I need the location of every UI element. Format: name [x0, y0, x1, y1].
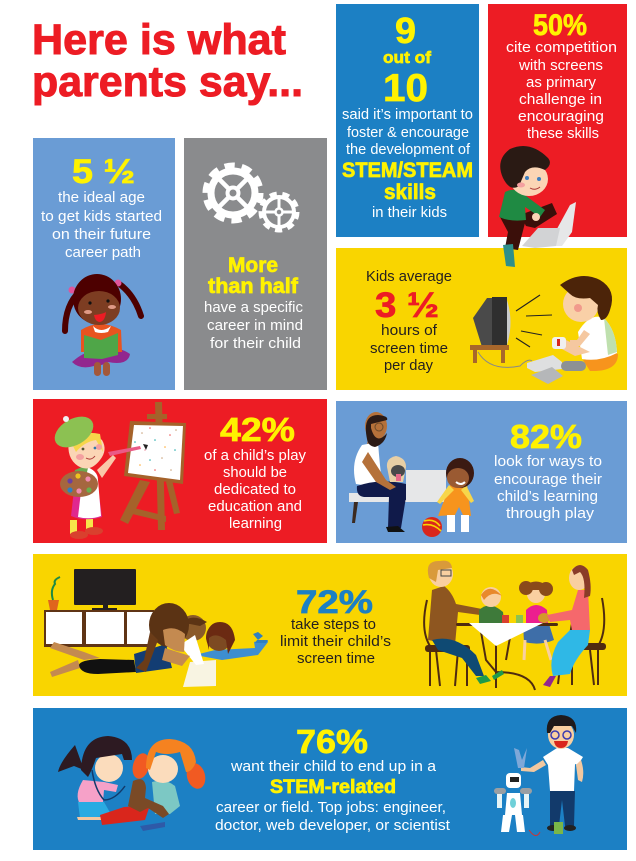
text: play description: learning [229, 516, 282, 532]
text: play description: education and [208, 499, 302, 515]
panel: 82 percent learning through play [336, 401, 627, 543]
text: specific career description: career in mind [207, 318, 303, 334]
icon: child painter with palette [49, 410, 141, 539]
icon: gears [206, 166, 297, 230]
text: kids average [366, 269, 452, 374]
text: competition description: encouraging [518, 109, 604, 125]
icon: mother and children reading on the floor [50, 603, 268, 687]
text: importance of STEM: the development of [346, 142, 471, 158]
icon: family at table [424, 561, 606, 690]
text: kids average: 3 ½ [375, 286, 439, 325]
stat: 5 1/2: 5 ½ [72, 153, 135, 191]
text: competition description: challenge in [519, 92, 602, 108]
stat: 9 out of 10: 10 [383, 67, 428, 110]
panel: 76 percent STEM career [33, 708, 627, 850]
text: importance of STEM: skills [384, 181, 436, 204]
icon: robot [494, 773, 540, 836]
text: STEM career description: want their child to end up in a [230, 759, 437, 775]
text: importance of STEM: foster & encourage [347, 125, 469, 141]
text: competition description: as primary [526, 75, 597, 91]
text: STEM career description: career or field. Top jobs: engineer, [216, 800, 446, 816]
icon: boy playing video game [552, 276, 618, 371]
icon: boy with pliers and circuit board [514, 715, 583, 834]
text: kids average: Kids average [366, 269, 452, 285]
text: STEM career description: doctor, web developer, or scientist [215, 818, 450, 834]
icon: boy with laptop [499, 146, 576, 267]
text: STEM career description [215, 759, 450, 834]
text: learning through play description: encourage their [494, 472, 602, 488]
panel: specific career [184, 138, 327, 390]
text: kids average: per day [384, 358, 434, 374]
text: ideal age description: career path [65, 245, 141, 261]
text: ideal age description: to get kids started [41, 209, 162, 225]
text: competition description: with screens [518, 58, 603, 74]
icon: easel and canvas [120, 402, 186, 530]
icon: television cabinet and plant [44, 569, 154, 647]
text: play description: of a child’s play [204, 448, 307, 464]
panel: ideal age [33, 138, 175, 390]
text: kids average: screen time [370, 341, 448, 357]
title: parents say... [32, 58, 303, 106]
text: specific career description: for their child [210, 336, 301, 352]
stat: 50%: 50% [533, 9, 587, 42]
text: importance of STEM: in their kids [372, 205, 447, 221]
heading: more than half [208, 254, 299, 298]
text: STEM career description: STEM-related [270, 777, 396, 798]
text: kids average: hours of [381, 323, 438, 339]
stat: 9 out of 10: 9 [395, 10, 416, 51]
heading: more than half: More [228, 254, 278, 277]
text: ideal age description [41, 190, 162, 261]
heading: more than half: than half [208, 275, 299, 298]
text: competition description: cite competition [506, 40, 617, 56]
text: specific career description: have a specific [204, 300, 303, 316]
text: competition description [506, 40, 617, 142]
text: play description: dedicated to [214, 482, 296, 498]
stat: 76%: 76% [296, 723, 368, 760]
stat: 82%: 82% [510, 418, 582, 455]
text: importance of STEM [342, 107, 473, 221]
icon: girls playing doctor with teddy [58, 736, 208, 831]
panel: screen time average [336, 248, 627, 390]
icon: father with dog on bench [349, 412, 474, 537]
text: specific career description [204, 300, 303, 352]
text: learning through play description: through play [506, 506, 595, 522]
text: play description [204, 448, 307, 532]
panel: competition with screens [488, 4, 627, 267]
stat: 42%: 42% [220, 411, 295, 448]
text: competition description: these skills [527, 126, 599, 142]
icon: girl reading a book [65, 274, 141, 376]
text: limit screen time description: limit their child’s [280, 634, 391, 650]
text: learning through play description: child’s learning [497, 489, 598, 505]
text: play description: should be [223, 465, 287, 481]
text: importance of STEM: STEM/STEAM [342, 159, 473, 182]
icon: television and game console [470, 295, 563, 384]
text: limit screen time description: screen time [297, 651, 375, 667]
text: learning through play description: look for ways to [494, 454, 602, 470]
title: Here is what [32, 16, 286, 64]
text: ideal age description: the ideal age [58, 190, 145, 206]
text: ideal age description: on their future [52, 227, 151, 243]
text: limit screen time description [280, 617, 391, 667]
text: learning through play description [494, 454, 602, 522]
text: limit screen time description: take steps to [291, 617, 376, 633]
stat: 9 out of 10 [383, 10, 431, 110]
text: importance of STEM: said it’s important to [342, 107, 473, 123]
title [32, 16, 303, 106]
panel: 72 percent limit screen time [33, 554, 627, 696]
stat: 72%: 72% [296, 584, 373, 620]
panel: 42 percent play [33, 399, 327, 543]
panel: 9 out of 10 [336, 4, 479, 237]
stat: 9 out of 10: out of [383, 48, 431, 67]
